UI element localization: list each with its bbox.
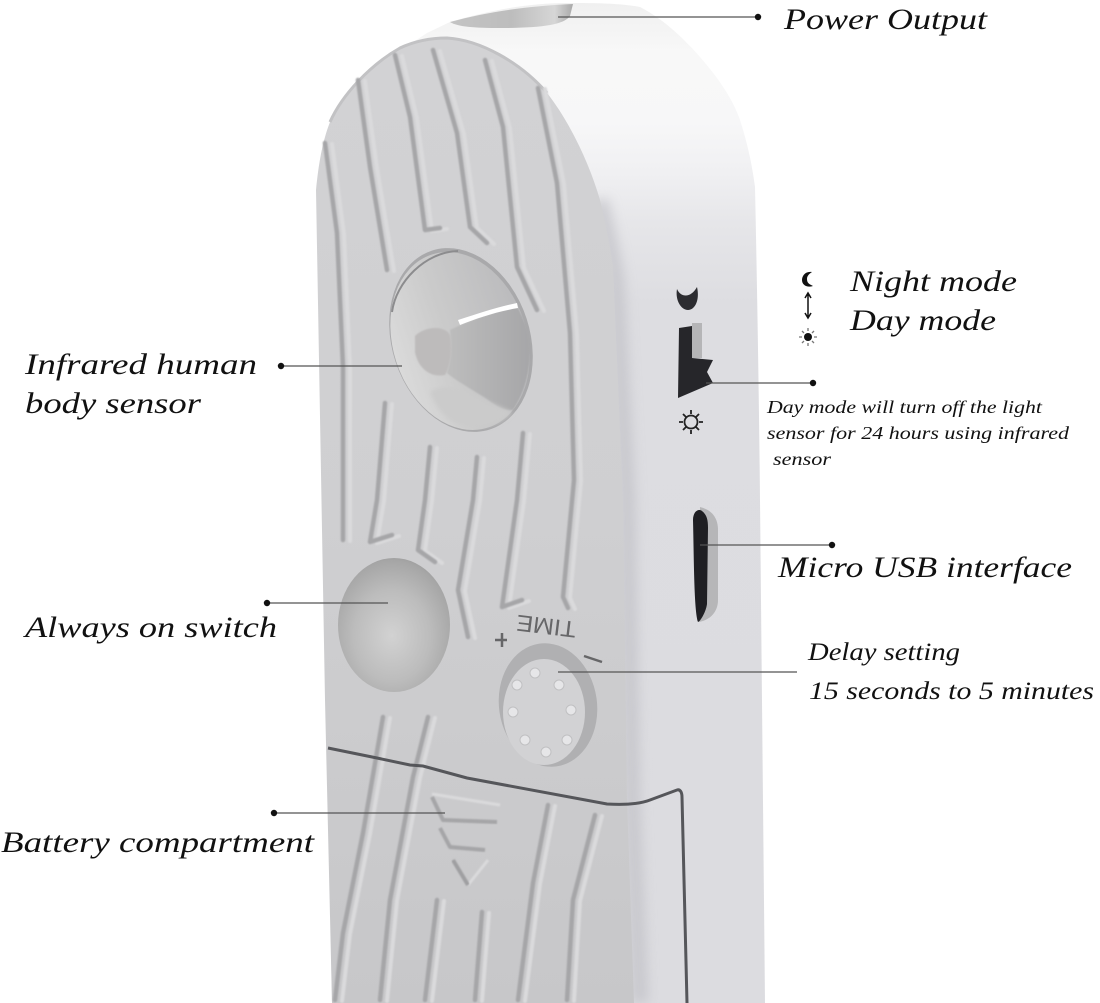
note: day mode: sensor for 24 hours using infrared: [767, 423, 1070, 443]
leader: micro usb: [700, 542, 835, 548]
TIME label: TIME: [515, 610, 578, 643]
note: day mode: sensor: [773, 449, 832, 469]
label: delay setting: 15 seconds to 5 minutes: [809, 678, 1094, 705]
leader: mode switch: [706, 380, 816, 386]
leader: always on switch: [264, 600, 388, 606]
lens dark interior: [447, 307, 530, 410]
note: day mode: [766, 397, 1070, 469]
ridge highlights: [332, 51, 602, 1001]
micro usb port: [693, 507, 718, 622]
label: power output: Power Output: [783, 3, 988, 36]
label: infrared human body sensor: body sensor: [25, 387, 201, 420]
time dial: [491, 610, 605, 773]
icon: moon on device: [677, 287, 698, 310]
label: infrared human body sensor: [24, 348, 257, 420]
face edge shading: [600, 200, 640, 1003]
icon: sun on device: [679, 410, 703, 434]
label: delay setting: Delay setting: [807, 639, 960, 666]
mode switch: [677, 287, 713, 434]
front face panel: [316, 38, 634, 1003]
label: micro usb interface: Micro USB interface: [777, 551, 1072, 584]
battery arrow markings: [432, 794, 500, 885]
always on switch: [338, 558, 450, 692]
label: always on switch: Always on switch: [23, 611, 277, 644]
leader: battery compartment: [271, 810, 445, 816]
label: infrared human body sensor: Infrared human: [24, 348, 257, 381]
ridges: [325, 50, 595, 1000]
label: delay setting: [807, 639, 1094, 705]
battery door seam: [328, 748, 687, 1003]
icon: moon to sun mode legend: [799, 272, 817, 346]
label: battery compartment: Battery compartment: [1, 826, 315, 859]
infrared sensor lens: [366, 229, 556, 451]
note: day mode: Day mode will turn off the light: [766, 397, 1043, 417]
power output recess: [450, 4, 573, 28]
label: day mode: Day mode: [849, 304, 996, 337]
device body: [316, 3, 765, 1003]
leader: power output: [558, 14, 761, 20]
leader: delay setting: [558, 671, 797, 673]
label: night mode: Night mode: [849, 265, 1017, 298]
leader: infrared sensor: [278, 363, 402, 369]
